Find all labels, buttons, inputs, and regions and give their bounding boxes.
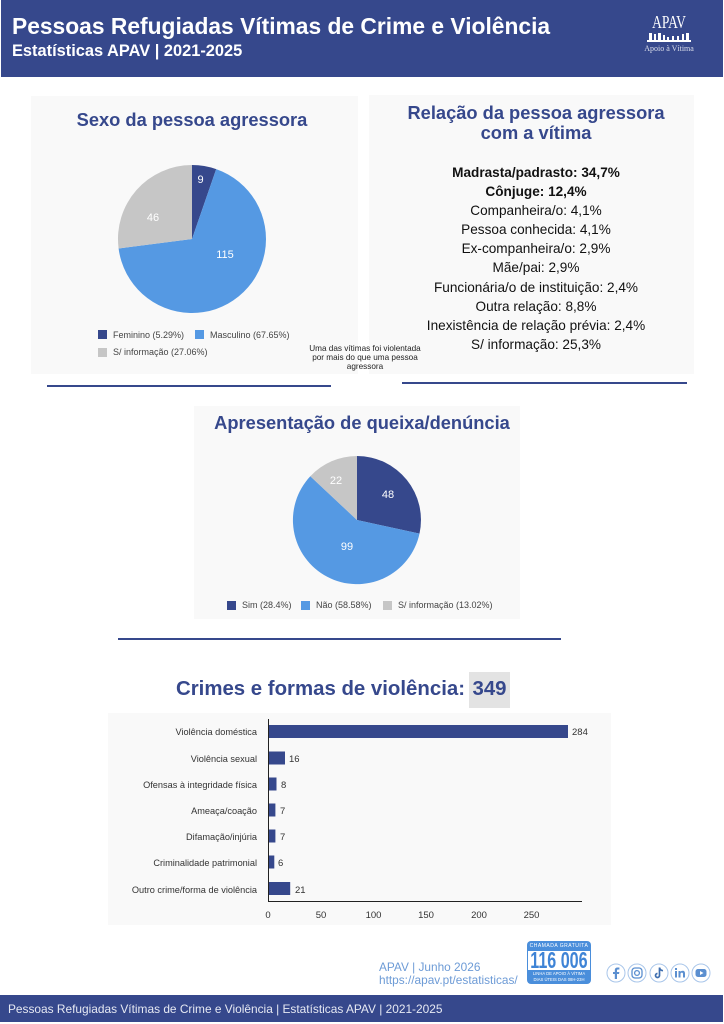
heading: relação: com a vítima (481, 122, 591, 143)
bar chart: 7 (280, 806, 285, 817)
pie chart: queixa: 48 (382, 489, 394, 501)
heading: sexo: Sexo da pessoa agressora (77, 109, 307, 130)
heading: relação (407, 102, 665, 143)
heading: crimes e formas de violência: Crimes e formas de violência: (176, 678, 465, 700)
legend: queixa: S/ informação (13.02%) (398, 600, 493, 610)
logo: APAV: Apoio à Vítima (644, 44, 694, 53)
heading: queixa: Apresentação de queixa/denúncia (214, 412, 510, 433)
footer credit (379, 960, 518, 986)
bar chart: 8 (281, 780, 286, 791)
bar chart: Difamação/injúria (186, 832, 258, 842)
pie chart: queixa (292, 456, 421, 584)
icon: instagram (632, 968, 642, 978)
footer text: Pessoas Refugiadas Vítimas de Crime e Violência | Estatísticas APAV | 2021-2025 (8, 1002, 442, 1016)
pie chart: queixa: 22 (330, 475, 342, 487)
legend: sexo: S/ informação (27.06%) (113, 347, 208, 357)
bar chart: 200 (471, 910, 487, 921)
bar chart: 100 (366, 910, 381, 921)
icon: tiktok (656, 968, 663, 978)
icon: linkedin (675, 968, 685, 978)
logo: APAV: APAV (652, 12, 686, 32)
list: relações (427, 165, 645, 352)
list: relações: Cônjuge: 12,4% (485, 184, 587, 199)
heading: crimes e formas de violência (176, 672, 510, 708)
pie chart: sexo (118, 165, 266, 313)
pie chart: sexo: 9 (197, 174, 204, 186)
bar chart: 284 (572, 727, 588, 738)
panel: sexo da pessoa agressora (31, 96, 358, 374)
list: relações: Companheira/o: 4,1% (470, 203, 602, 218)
legend: sexo: Feminino (5.29%) (113, 330, 184, 340)
note: múltiplas pessoas agressoras: Uma das vítimas foi violentada (309, 344, 421, 353)
list: relações: Inexistência de relação prévia: 2,4% (427, 318, 645, 333)
pie chart: sexo: 46 (147, 212, 159, 224)
bar chart: 6 (278, 858, 283, 869)
list: relações: Funcionária/o de instituição: 2,4% (434, 280, 638, 295)
heading: relação: Relação da pessoa agressora (407, 102, 665, 123)
footer credit: APAV | Junho 2026 (379, 960, 480, 974)
bar chart: 150 (418, 910, 434, 921)
note: múltiplas pessoas agressoras: por mais do que uma pessoa (312, 353, 418, 362)
legend: sexo (98, 330, 290, 357)
list: relações: Ex-companheira/o: 2,9% (462, 241, 610, 256)
legend: queixa: Não (58.58%) (316, 600, 372, 610)
panel: bar chart crimes (108, 713, 611, 925)
bar chart: 50 (316, 910, 326, 921)
list: relações: Pessoa conhecida: 4,1% (461, 222, 611, 237)
legend: sexo: Masculino (67.65%) (210, 330, 290, 340)
helpline badge 116 006 (527, 941, 591, 984)
logo: APAV (644, 12, 694, 53)
bar chart: Outro crime/forma de violência (132, 885, 258, 895)
bar chart: Criminalidade patrimonial (153, 858, 257, 868)
bar chart: 250 (524, 910, 539, 921)
icon: facebook (613, 968, 619, 979)
footer credit: https://apav.pt/estatisticas/ (379, 972, 518, 986)
panel: queixa/denúncia (194, 406, 520, 619)
list: relações: Outra relação: 8,8% (476, 299, 596, 314)
bar chart: Violência sexual (191, 754, 257, 764)
social icons (606, 964, 710, 982)
panel: relação com a vítima (369, 95, 694, 374)
bar chart (132, 719, 588, 921)
bar chart: 21 (295, 885, 306, 896)
bar chart: 0 (265, 910, 271, 921)
note: múltiplas pessoas agressoras (309, 344, 421, 371)
list: relações: Mãe/pai: 2,9% (493, 260, 579, 275)
bar chart: 7 (280, 832, 285, 843)
subtitle: Estatísticas APAV | 2021-2025 (12, 42, 242, 60)
pie chart: queixa: 99 (341, 541, 353, 553)
note: múltiplas pessoas agressoras: agressora (347, 362, 383, 371)
list: relações: Madrasta/padrasto: 34,7% (452, 165, 620, 180)
helpline badge 116 006: CHAMADA GRATUITA (530, 943, 588, 949)
helpline badge 116 006: LINHA DE APOIO À VÍTIMA (533, 971, 585, 976)
icon: youtube (696, 969, 706, 977)
legend: queixa (227, 600, 493, 610)
heading: crimes e formas de violência: 349 (472, 678, 507, 700)
pie chart: sexo: 115 (216, 249, 234, 261)
title: Pessoas Refugiadas Vítimas de Crime e Violência (12, 13, 550, 39)
bar chart: Violência doméstica (175, 727, 258, 737)
bar chart: 16 (289, 754, 300, 765)
list: relações: S/ informação: 25,3% (471, 337, 601, 352)
legend: queixa: Sim (28.4%) (242, 600, 292, 610)
footer banner (0, 995, 723, 1022)
helpline badge 116 006: DIAS ÚTEIS DAS 08H-23H (534, 977, 584, 982)
bar chart: Ameaça/coação (191, 806, 257, 816)
header banner (1, 0, 723, 77)
bar chart: Ofensas à integridade física (143, 780, 258, 790)
